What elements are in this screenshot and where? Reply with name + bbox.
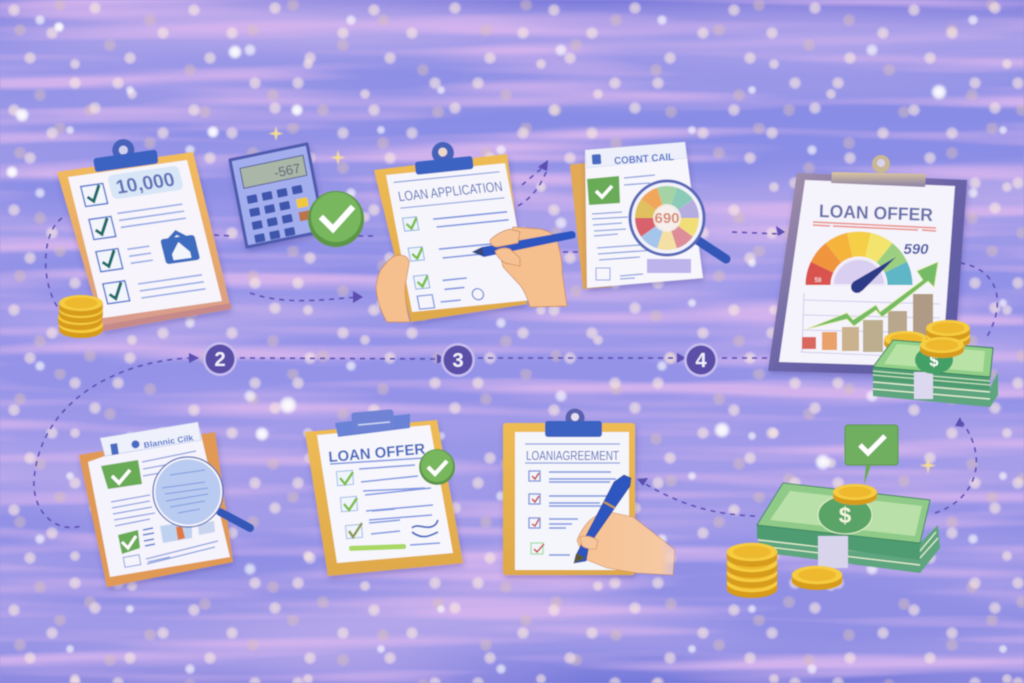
icon: handshake — [412, 520, 438, 537]
step marker: 3 — [441, 343, 475, 377]
heading: LOANIAGREEMENT — [526, 448, 619, 463]
hand: right palm — [500, 227, 567, 307]
icon: large cash stack — [757, 483, 940, 573]
gauge: 58 — [815, 278, 822, 284]
green check box — [587, 176, 620, 205]
amount 10,000: 10,000 — [114, 169, 177, 199]
icon: green check badge — [419, 449, 455, 485]
step marker: 2 — [203, 342, 237, 376]
step marker: 4: 4 — [695, 350, 707, 372]
heading: LOAN OFFER — [819, 201, 933, 225]
icon: coin stack bottom — [727, 543, 777, 598]
panel: checklist clipboard with 10,000 — [57, 135, 231, 331]
header text — [110, 431, 194, 455]
thumb — [580, 536, 598, 549]
icon: green check bubble — [845, 425, 898, 485]
panel: loan agreement clipboard with hand — [503, 408, 675, 575]
panel: document with magnifier bottom left — [79, 422, 250, 587]
clip — [413, 139, 474, 175]
step marker: 3: 3 — [452, 350, 464, 372]
pen — [574, 475, 631, 563]
hand — [577, 512, 675, 575]
icon: large cash stack: $ — [839, 503, 851, 528]
gauge: 590 — [903, 241, 929, 258]
panel: loan application clipboard with hands — [374, 139, 576, 322]
icon: calculator: -567 — [273, 161, 302, 181]
clip — [545, 408, 602, 437]
header text: COBNT CAIL — [614, 152, 674, 167]
arrow: green growth — [807, 262, 938, 329]
arrowheads — [189, 160, 964, 486]
gauge — [815, 241, 929, 293]
clip — [831, 155, 926, 187]
icon: calculator — [230, 144, 324, 247]
magnifier with score wheel: 690 — [654, 210, 680, 227]
icon: single coin — [792, 566, 842, 590]
header text: Blannic Cilk — [143, 433, 194, 450]
chart: rising bars — [801, 293, 940, 358]
icon: house — [158, 228, 200, 264]
panel: loan offer clipboard bottom centre — [305, 409, 463, 576]
icon: cash stack with coins right — [873, 320, 998, 407]
panel: large loan offer clipboard — [768, 155, 967, 376]
panel: credit report with magnifier — [570, 142, 726, 289]
clip — [335, 409, 410, 437]
icon: cash stack with coins right: $ — [930, 353, 939, 370]
clip — [91, 135, 159, 172]
step marker: 4 — [684, 343, 718, 377]
connector: dashed flow paths — [34, 168, 997, 528]
icon: green check badge — [308, 191, 364, 247]
fingers on pen — [490, 229, 520, 266]
step marker: 2: 2 — [214, 349, 226, 371]
hand: left — [376, 255, 410, 322]
icon: coin stack left — [58, 295, 103, 338]
green check box — [101, 460, 142, 489]
pen — [472, 231, 576, 257]
heading: LOAN OFFER — [328, 441, 426, 466]
magnifier with score wheel — [630, 181, 726, 259]
magnifier — [153, 457, 250, 528]
heading: LOAN APPLICATION — [397, 179, 504, 204]
header text — [592, 149, 674, 169]
